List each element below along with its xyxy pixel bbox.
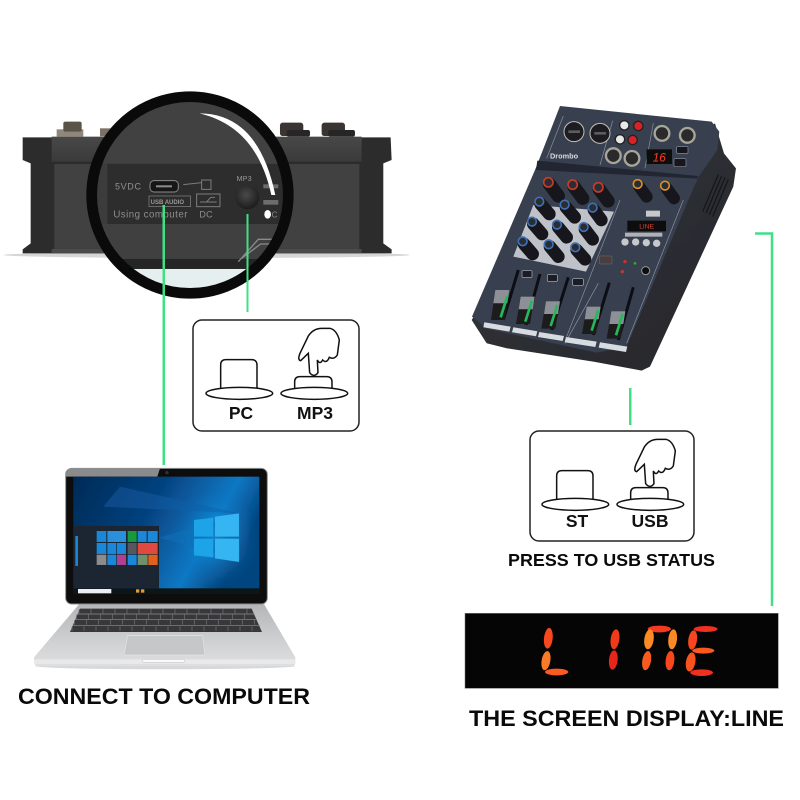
laptop screen (73, 477, 259, 594)
laptop base (34, 604, 295, 666)
MP3 label: MP3 (297, 403, 333, 423)
headphone jack and switches (599, 256, 650, 275)
indicator marks (263, 184, 278, 205)
faders (491, 270, 633, 340)
top buttons (674, 147, 688, 167)
magnified detail (102, 102, 283, 288)
PC label: PC (229, 403, 254, 423)
EQ knobs (518, 197, 601, 259)
USB audio label: USB AUDIO (151, 200, 184, 206)
switch panel: ST / USB (530, 431, 694, 541)
laptop lid (66, 468, 267, 604)
taskbar (73, 588, 259, 594)
input sockets (564, 122, 610, 143)
PC button released (206, 360, 273, 399)
panel frame (530, 431, 694, 541)
USB label: USB (632, 511, 668, 531)
ST button released (542, 471, 609, 510)
keyboard (70, 609, 262, 632)
green line: USB port to laptop (162, 205, 165, 465)
channel label strips (483, 322, 627, 352)
channel switches (522, 271, 583, 285)
EQ plate (513, 205, 614, 272)
gain knobs (544, 178, 674, 201)
rear label panel (107, 164, 294, 224)
display background (465, 613, 778, 688)
USB port and MP3 module: LINE (639, 224, 655, 231)
ST label: ST (566, 511, 588, 531)
5VDC label: 5VDC (115, 181, 142, 191)
brand text: Drombo (550, 151, 579, 160)
switch panel: PC / MP3 (193, 320, 359, 431)
highlight arc (199, 113, 275, 195)
windows logo (194, 513, 239, 562)
channel display: 16 (653, 150, 666, 164)
MP3 button pressed (281, 377, 348, 399)
USB audio label (149, 196, 191, 207)
magnified detail: C (272, 211, 278, 220)
green bracket: display to mixer (755, 234, 772, 606)
MP3 push button (236, 188, 259, 210)
icon: pointing hand (299, 328, 339, 375)
caption: press to USB status: PRESS TO USB STATUS (508, 550, 715, 570)
caption: connect to computer: CONNECT TO COMPUTER (18, 684, 310, 709)
panel frame (193, 320, 359, 431)
laptop (34, 468, 295, 669)
white PC mark (264, 210, 271, 219)
USB port and MP3 module (621, 211, 666, 247)
micro USB port (150, 181, 178, 192)
panel lines (547, 116, 683, 343)
RCA jacks (615, 121, 643, 145)
LED display (465, 613, 778, 688)
using computer label: Using computer (113, 210, 188, 221)
letter E (684, 626, 718, 676)
letter L (540, 628, 568, 675)
divider strip (536, 161, 698, 179)
device shadow (3, 252, 410, 258)
line jacks (606, 126, 695, 166)
light beams (175, 487, 258, 587)
device body (23, 137, 392, 253)
USB button pressed (617, 488, 684, 510)
magnifier ring (92, 97, 288, 293)
mixer faceplate (472, 106, 719, 353)
caption: the screen display: THE SCREEN DISPLAY:LINE (469, 706, 784, 731)
icon: pointing hand (635, 439, 675, 486)
DC label: DC (199, 210, 213, 220)
start menu (73, 526, 159, 588)
letter I (608, 629, 621, 670)
mixer top view (472, 106, 736, 371)
trackpad (124, 636, 205, 655)
rear view of the mixer with magnifier (3, 93, 410, 297)
laptop shadow (35, 663, 295, 669)
MP3 label: MP3 (237, 176, 252, 183)
letter N (641, 626, 678, 671)
rear connectors (57, 122, 355, 137)
channel display (647, 149, 672, 164)
green line: MP3 button to switch box (246, 214, 248, 312)
USB symbol (183, 180, 220, 207)
mixer side wall (472, 123, 736, 371)
green line: mixer to status box (629, 388, 632, 425)
